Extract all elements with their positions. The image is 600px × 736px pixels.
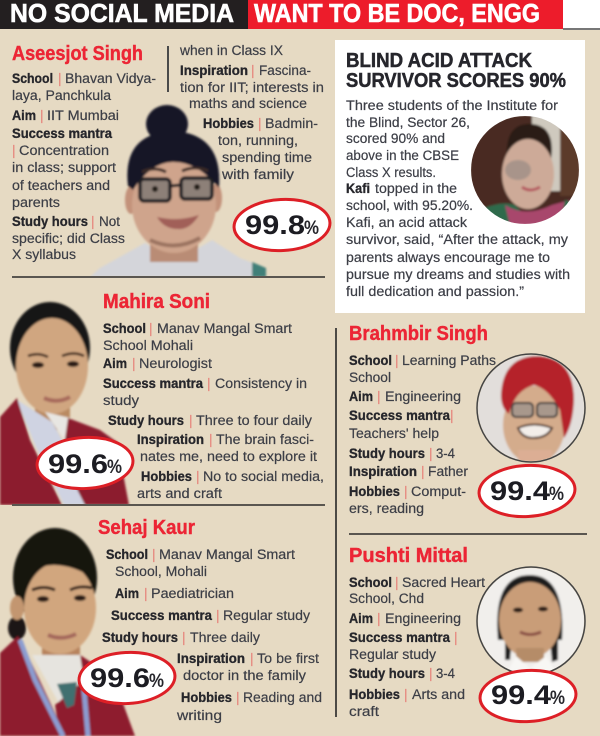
details: laya, Panchkula bbox=[12, 88, 112, 103]
details: Success mantra bbox=[111, 608, 212, 623]
body text: Class X results. bbox=[346, 165, 436, 180]
details: Not bbox=[99, 214, 120, 229]
body text: topped in the bbox=[375, 181, 457, 196]
details: in class; support bbox=[12, 160, 116, 175]
details: Success mantra bbox=[12, 126, 112, 141]
details: | bbox=[454, 630, 458, 645]
details: Three daily bbox=[190, 630, 260, 645]
body text: Three students of the Institute for bbox=[346, 98, 559, 113]
details: X syllabus bbox=[12, 247, 76, 262]
details: Inspiration bbox=[349, 464, 417, 479]
photo: Pushti Mittal bbox=[477, 567, 587, 677]
details: | bbox=[144, 586, 148, 601]
details: Bhavan Vidya- bbox=[65, 71, 156, 86]
details: maths and science bbox=[189, 96, 307, 111]
details: Study hours bbox=[108, 413, 184, 428]
score badge: 99.4%: % bbox=[550, 688, 565, 709]
details: School bbox=[349, 370, 391, 385]
body text: scored 90% and bbox=[346, 131, 445, 146]
details: | bbox=[196, 469, 200, 484]
details: | bbox=[216, 608, 220, 623]
score badge: 99.8% bbox=[233, 197, 331, 253]
photo: Mahira Soni bbox=[0, 302, 129, 505]
body text bbox=[346, 98, 570, 299]
details: craft bbox=[349, 704, 379, 719]
photo: Sehaj Kaur bbox=[0, 528, 135, 736]
details: Aim bbox=[349, 389, 373, 404]
score badge: 99.4% bbox=[478, 463, 576, 519]
details: | bbox=[258, 116, 262, 131]
details: Aim bbox=[115, 586, 139, 601]
details: | bbox=[40, 108, 44, 123]
score badge: 99.4% bbox=[479, 668, 577, 724]
details: 3-4 bbox=[436, 446, 455, 461]
name: Pushti Mittal bbox=[349, 545, 468, 567]
details: Engineering bbox=[385, 389, 461, 404]
details: | bbox=[404, 484, 408, 499]
panel: Mahira Soni bbox=[0, 291, 325, 506]
details bbox=[349, 353, 496, 516]
score badge: 99.4%: 99.4 bbox=[490, 476, 550, 506]
details: Teachers' help bbox=[349, 426, 439, 441]
details: Concentration bbox=[19, 143, 109, 158]
details: Sacred Heart bbox=[402, 575, 485, 590]
details bbox=[102, 547, 322, 723]
score badge: 99.6%: % bbox=[107, 457, 122, 478]
panel: Pushti Mittal bbox=[349, 545, 587, 724]
details: Inspiration bbox=[180, 63, 248, 78]
body text: parents always encourage me to bbox=[346, 250, 550, 265]
details: Three to four daily bbox=[196, 413, 312, 428]
details: nates me, need to explore it bbox=[140, 449, 317, 464]
details: Study hours bbox=[349, 666, 425, 681]
body text: Kafi bbox=[346, 181, 370, 196]
details: Father bbox=[428, 464, 469, 479]
details: Engineering bbox=[385, 611, 461, 626]
details: | bbox=[395, 575, 399, 590]
details: School, Chd bbox=[349, 591, 424, 606]
details: doctor in the family bbox=[183, 668, 306, 683]
details bbox=[103, 321, 324, 501]
details: when in Class IX bbox=[179, 43, 283, 58]
heading: BLIND ACID ATTACK bbox=[346, 50, 533, 72]
body text: full dedication and passion.” bbox=[346, 284, 524, 299]
details: Inspiration bbox=[177, 651, 245, 666]
score badge: 99.4%: % bbox=[549, 484, 564, 505]
headline banner bbox=[0, 0, 600, 30]
score badge: 99.8%: % bbox=[304, 218, 319, 239]
name: Mahira Soni bbox=[103, 291, 210, 313]
details bbox=[12, 43, 324, 262]
body text: pursue my dreams and studies with bbox=[346, 267, 570, 282]
details: Hobbies bbox=[141, 469, 192, 484]
details: spending time bbox=[222, 150, 312, 165]
details: ton, running, bbox=[218, 133, 298, 148]
details: School bbox=[12, 71, 53, 86]
details: Regular study bbox=[223, 608, 310, 623]
details: | bbox=[421, 464, 425, 479]
score badge: 99.6%: 99.6 bbox=[48, 449, 108, 479]
panel: Brahmbir Singh bbox=[349, 323, 587, 535]
name: Brahmbir Singh bbox=[349, 323, 488, 345]
details: | bbox=[377, 389, 381, 404]
body text: Kafi, an acid attack bbox=[346, 215, 467, 230]
details: ers, reading bbox=[349, 501, 424, 516]
details: | bbox=[149, 321, 153, 336]
details: Arts and bbox=[412, 687, 465, 702]
panel: Sehaj Kaur bbox=[0, 517, 322, 736]
details: Aim bbox=[349, 611, 373, 626]
details: | bbox=[152, 547, 156, 562]
details: School, Mohali bbox=[115, 564, 207, 579]
details: | bbox=[377, 611, 381, 626]
details: Success mantra bbox=[103, 376, 203, 391]
details: | bbox=[12, 143, 16, 158]
details: study bbox=[103, 393, 139, 408]
name: Aseesjot Singh bbox=[12, 43, 143, 65]
details: writing bbox=[176, 708, 222, 723]
panel: Aseesjot Singh bbox=[12, 43, 331, 278]
body text: the Blind, Sector 26, bbox=[346, 115, 470, 130]
details: | bbox=[209, 432, 213, 447]
body text: school, with 95.20%. bbox=[346, 198, 473, 213]
photo: Kafi bbox=[470, 115, 580, 225]
details: tion for IIT; interests in bbox=[180, 80, 324, 95]
details: Success mantra bbox=[349, 630, 450, 645]
details: Badmin- bbox=[265, 116, 318, 131]
details: Study hours bbox=[349, 446, 425, 461]
score badge: 99.6% bbox=[78, 650, 176, 706]
details: No to social media, bbox=[203, 469, 324, 484]
details: | bbox=[132, 356, 136, 371]
score badge: 99.6% bbox=[36, 435, 134, 491]
details: Paediatrician bbox=[151, 586, 234, 601]
details: Learning Paths bbox=[402, 353, 496, 368]
details: Hobbies bbox=[203, 116, 254, 131]
details bbox=[349, 575, 485, 719]
details: | bbox=[207, 376, 211, 391]
details: Regular study bbox=[349, 647, 436, 662]
details: Neurologist bbox=[139, 356, 212, 371]
details: | bbox=[236, 690, 240, 705]
details: Inspiration bbox=[137, 432, 204, 447]
details: The brain fasci- bbox=[216, 432, 314, 447]
score badge: 99.4%: 99.4 bbox=[491, 680, 551, 710]
details: | bbox=[450, 408, 454, 423]
details: | bbox=[58, 71, 62, 86]
details: School Mohali bbox=[103, 338, 193, 353]
details: School bbox=[349, 353, 392, 368]
details: Comput- bbox=[411, 484, 466, 499]
details: Manav Mangal Smart bbox=[157, 321, 292, 336]
heading: SURVIVOR SCORES 90% bbox=[346, 70, 566, 92]
details: To be first bbox=[257, 651, 319, 666]
name: Sehaj Kaur bbox=[98, 517, 195, 539]
details: Hobbies bbox=[349, 484, 400, 499]
details: School bbox=[106, 547, 148, 562]
heading bbox=[346, 50, 566, 92]
details: Study hours bbox=[12, 214, 88, 229]
details: School bbox=[103, 321, 146, 336]
details: Manav Mangal Smart bbox=[159, 547, 295, 562]
details: arts and craft bbox=[137, 486, 222, 501]
details: Hobbies bbox=[181, 690, 232, 705]
photo: Brahmbir Singh bbox=[477, 354, 587, 464]
details: Hobbies bbox=[349, 687, 400, 702]
details: | bbox=[404, 687, 408, 702]
details: | bbox=[395, 353, 399, 368]
details: Consistency in bbox=[215, 376, 307, 391]
details: 3-4 bbox=[436, 666, 455, 681]
details: Aim bbox=[103, 356, 127, 371]
details: | bbox=[429, 666, 433, 681]
score badge: 99.6%: % bbox=[149, 671, 164, 692]
details: | bbox=[182, 630, 186, 645]
body text: above in the CBSE bbox=[346, 148, 459, 163]
details: parents bbox=[12, 195, 60, 210]
score badge: 99.8%: 99.8 bbox=[245, 210, 305, 240]
details: IIT Mumbai bbox=[47, 108, 119, 123]
details: Fascina- bbox=[259, 63, 311, 78]
details: Success mantra bbox=[349, 408, 450, 423]
details: | bbox=[91, 214, 95, 229]
details: of teachers and bbox=[12, 178, 110, 193]
details: | bbox=[189, 413, 193, 428]
details: Study hours bbox=[102, 630, 178, 645]
details: | bbox=[429, 446, 433, 461]
body text: survivor, said, “After the attack, my bbox=[346, 232, 568, 247]
panel: blind acid attack survivor bbox=[335, 40, 585, 313]
details: | bbox=[250, 651, 254, 666]
photo: Aseesjot Singh bbox=[90, 105, 266, 277]
details: Reading and bbox=[243, 690, 322, 705]
details: School bbox=[349, 575, 392, 590]
details: specific; did Class bbox=[12, 231, 125, 246]
details: | bbox=[251, 63, 255, 78]
details: with family bbox=[221, 167, 294, 182]
score badge: 99.6%: 99.6 bbox=[90, 663, 150, 693]
details: Aim bbox=[12, 108, 36, 123]
